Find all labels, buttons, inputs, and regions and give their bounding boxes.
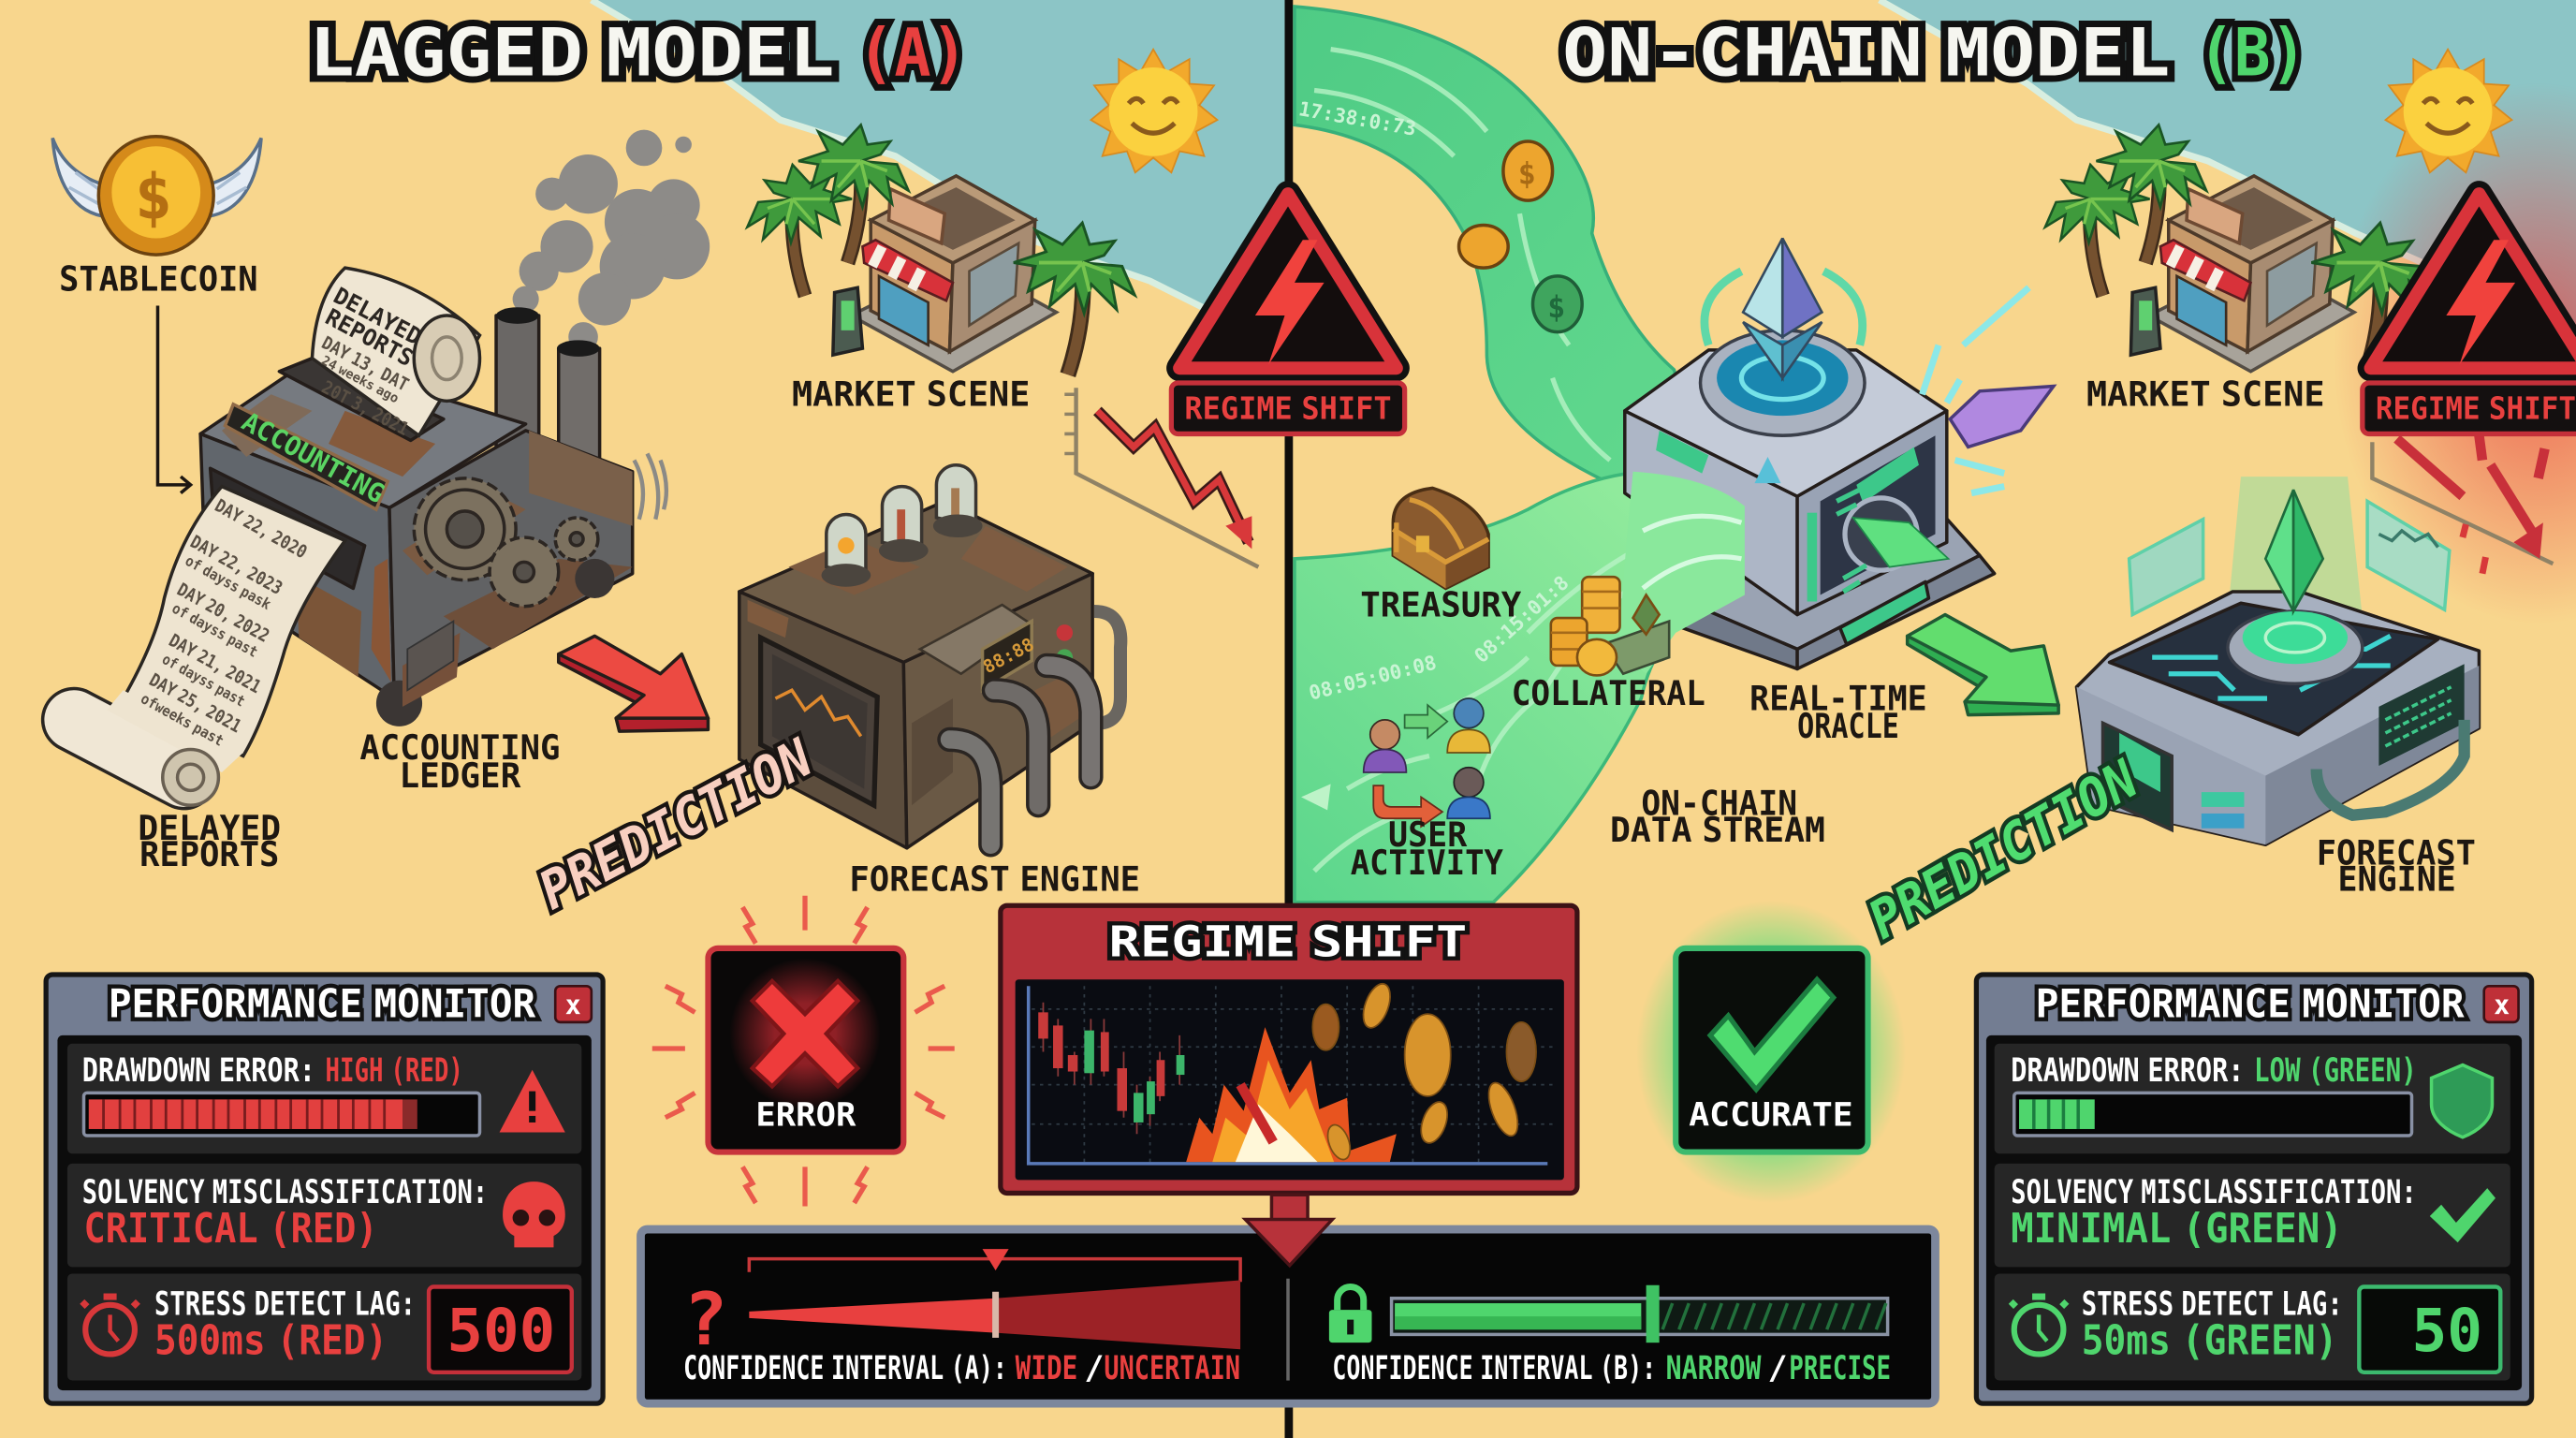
top report paper: REPORTS xyxy=(321,303,417,372)
row: stress detect lag xyxy=(67,1273,581,1381)
row: stress detect lag: STRESS DETECT LAG: xyxy=(2082,1284,2343,1323)
illustration: rusty forecast engine xyxy=(739,465,1120,848)
icon: sun (B) xyxy=(2385,50,2512,172)
row: solvency misclassification: SOLVENCY MISCLASSIFICATION: xyxy=(2011,1173,2417,1211)
label: forecast engine (B) xyxy=(2317,832,2476,899)
row: solvency misclassification xyxy=(67,1164,581,1267)
badge: error rays xyxy=(652,896,955,1206)
purple crystal with sparks xyxy=(1922,287,2054,493)
bar: narrow interval xyxy=(1329,1285,1891,1387)
arrow: green to forecast engine xyxy=(1908,615,2058,715)
machine body xyxy=(200,359,633,726)
icon: user activity xyxy=(1301,698,1490,827)
chart: falling price (A) xyxy=(1064,388,1258,567)
pipes xyxy=(949,666,1090,844)
stream highlight strokes xyxy=(1314,50,1708,871)
sea: left panel xyxy=(592,0,1284,348)
illustration: holographic forecast engine xyxy=(2076,477,2479,844)
row: stress detect lag: 500 xyxy=(446,1296,555,1365)
bar: narrow interval: CONFIDENCE INTERVAL (B): xyxy=(1332,1349,1656,1387)
label: accounting ledger: ACCOUNTING xyxy=(359,727,560,768)
close button: x xyxy=(565,990,581,1020)
label: prediction (A): PREDICTION xyxy=(530,727,823,922)
stream timestamps xyxy=(1297,96,1573,705)
row: stress detect lag: 50ms (GREEN) xyxy=(2082,1316,2338,1364)
red glow at right edge xyxy=(2333,82,2576,624)
long receipt roll: DAY 22, 2023 xyxy=(186,531,286,599)
panel title: REGIME SHIFT xyxy=(1109,917,1467,967)
row: stress detect lag xyxy=(1995,1273,2510,1381)
badge: error xyxy=(708,948,903,1152)
long receipt roll: of dayss pask xyxy=(183,551,274,613)
icon: winged stablecoin xyxy=(52,137,261,255)
long receipt roll: DAY 22, 2020 xyxy=(212,494,311,563)
coins in stream: $ xyxy=(1518,158,1536,192)
top report paper xyxy=(312,268,479,440)
engine pipes xyxy=(2317,720,2465,815)
coins in stream xyxy=(1459,141,1582,332)
hologram beam xyxy=(2224,477,2365,649)
badge: error: ERROR xyxy=(755,1095,856,1134)
icon: sun (A) xyxy=(1090,50,1218,172)
long receipt roll: of dayss past xyxy=(169,599,261,661)
title: lagged model: (A) xyxy=(857,15,968,92)
label: treasury: TREASURY xyxy=(1360,584,1522,624)
oracle lens xyxy=(1837,488,1949,592)
label: user activity xyxy=(1351,814,1504,883)
label: on-chain data stream: ON-CHAIN xyxy=(1641,784,1797,824)
oracle top ring xyxy=(1701,330,1865,435)
top report paper: DAY 13, DAT xyxy=(318,332,413,396)
panel: performance monitor (B) xyxy=(1976,975,2532,1403)
panel: performance monitor (A) xyxy=(46,975,603,1403)
arrow: red to forecast engine xyxy=(559,636,708,731)
coins in stream: $ xyxy=(1547,291,1565,325)
row: drawdown error: DRAWDOWN ERROR: xyxy=(82,1051,315,1090)
stream timestamps: 17:38:0:73 xyxy=(1297,96,1418,140)
engine body xyxy=(2076,592,2479,844)
title: on-chain model: ON-CHAIN MODEL xyxy=(1562,15,2170,92)
row: stress detect lag: STRESS DETECT LAG: xyxy=(154,1284,416,1323)
cone: wide interval xyxy=(683,1249,1240,1387)
row: solvency misclassification: SOLVENCY MISCLASSIFICATION: xyxy=(82,1173,488,1211)
explosion xyxy=(1186,1027,1397,1162)
engine body xyxy=(739,501,1092,848)
ledger slot xyxy=(211,468,365,588)
row: drawdown error xyxy=(67,1044,581,1153)
label: user activity: ACTIVITY xyxy=(1351,843,1504,883)
digital readout and lights: 88:88 xyxy=(979,634,1037,678)
row: drawdown error: LOW (GREEN) xyxy=(2254,1051,2417,1090)
stream timestamps: 08:15:01:8 xyxy=(1470,571,1573,668)
long receipt roll: ofweeks past xyxy=(138,689,227,750)
icon: collateral coins xyxy=(1551,577,1669,675)
top report paper: 24 weeks ago xyxy=(318,353,401,406)
label: forecast engine (B): FORECAST xyxy=(2317,832,2476,873)
label: forecast engine (B): ENGINE xyxy=(2338,858,2456,899)
label: real-time oracle: ORACLE xyxy=(1797,706,1899,746)
long receipt roll: of dayss past xyxy=(159,650,248,711)
oracle base xyxy=(1682,507,1995,668)
crash chart xyxy=(1016,979,1564,1180)
icon: regime shift warning (centre): REGIME SHIFT xyxy=(1184,390,1392,427)
green crystal xyxy=(2265,490,2323,611)
title: on-chain model: (B) xyxy=(2198,15,2306,92)
stream timestamps: 08:05:00:08 xyxy=(1307,651,1439,705)
top slot xyxy=(279,359,444,440)
label: real-time oracle xyxy=(1749,678,1927,746)
chimneys xyxy=(496,307,600,463)
hologram screens xyxy=(2130,501,2450,615)
panel: confidence intervals xyxy=(640,1229,1936,1403)
cone: wide interval: WIDE xyxy=(1016,1349,1077,1387)
label: prediction (B): PREDICTION xyxy=(1859,749,2149,951)
row: drawdown error: HIGH (RED) xyxy=(326,1051,463,1090)
label: delayed reports xyxy=(138,808,281,874)
row: solvency misclassification: MINIMAL (GREEN) xyxy=(2011,1205,2343,1253)
badge: accurate: ACCURATE xyxy=(1689,1095,1853,1134)
close button: x xyxy=(2494,990,2510,1020)
illustration: market scene (A) xyxy=(747,125,1134,374)
arrow head over confidence panel xyxy=(1245,1220,1332,1266)
row: solvency misclassification xyxy=(1995,1164,2510,1267)
label: user activity: USER xyxy=(1388,814,1468,855)
top report paper: 20T 3, 2021 xyxy=(318,376,413,440)
monitor title: PERFORMANCE MONITOR xyxy=(2036,981,2465,1027)
label: market scene (A): MARKET SCENE xyxy=(792,374,1030,415)
cone: wide interval: UNCERTAIN xyxy=(1104,1349,1240,1387)
icon: treasure chest xyxy=(1393,488,1488,588)
label: delayed reports: REPORTS xyxy=(139,834,279,874)
long receipt roll: DAY 21, 2021 xyxy=(166,629,265,697)
cone: wide interval: CONFIDENCE INTERVAL (A): xyxy=(683,1349,1007,1387)
stream entering oracle xyxy=(1618,472,1745,674)
portal ring xyxy=(2228,611,2363,683)
label: forecast engine: FORECAST ENGINE xyxy=(849,858,1140,899)
central divider xyxy=(1284,0,1293,1438)
digital readout and lights xyxy=(979,611,1120,724)
label: market scene (B): MARKET SCENE xyxy=(2086,374,2324,415)
row: stress detect lag: 50 xyxy=(2411,1296,2482,1365)
bar: narrow interval: NARROW xyxy=(1666,1349,1762,1387)
label: on-chain data stream: DATA STREAM xyxy=(1610,810,1825,850)
stream flow lines xyxy=(1643,516,1741,588)
close button xyxy=(555,986,592,1022)
on-chain data stream: lower xyxy=(1295,472,1758,902)
title: lagged model: LAGGED MODEL xyxy=(309,15,835,92)
label: collateral: COLLATERAL xyxy=(1512,673,1705,713)
cone: wide interval: / xyxy=(1084,1349,1105,1387)
monitor title: PERFORMANCE MONITOR xyxy=(109,981,536,1027)
title: lagged model xyxy=(309,15,968,92)
cone: wide interval: ? xyxy=(683,1278,728,1362)
long receipt roll xyxy=(74,487,345,805)
bar: narrow interval: PRECISE xyxy=(1789,1349,1891,1387)
label: accounting ledger xyxy=(359,727,560,796)
engine screen xyxy=(761,638,877,805)
vibration marks xyxy=(634,453,666,520)
icon: regime shift warning (centre) xyxy=(1171,194,1405,433)
illustration: smoke xyxy=(513,130,710,352)
label: on-chain data stream xyxy=(1610,784,1825,850)
top report paper: DELAYED xyxy=(329,282,426,350)
label: accounting ledger: LEDGER xyxy=(399,756,521,796)
arrow: stablecoin to ledger xyxy=(157,306,191,493)
row: drawdown error: DRAWDOWN ERROR: xyxy=(2011,1051,2244,1090)
label: stablecoin: STABLECOIN xyxy=(59,259,258,300)
long receipt roll: DAY 20, 2022 xyxy=(173,579,273,647)
row: solvency misclassification: CRITICAL (RED) xyxy=(84,1205,378,1253)
long receipt roll: DAY 25, 2021 xyxy=(146,669,245,737)
label: delayed reports: DELAYED xyxy=(138,808,281,848)
illustration: accounting machine xyxy=(74,268,666,805)
icon: regime shift warning (B) xyxy=(2363,194,2576,433)
badge: accurate xyxy=(1676,948,1868,1152)
row: drawdown error xyxy=(1995,1044,2510,1153)
label: real-time oracle: REAL-TIME xyxy=(1749,678,1927,718)
oracle body xyxy=(1625,350,1947,615)
icon: winged stablecoin: $ xyxy=(135,160,172,233)
on-chain data stream: upper xyxy=(1295,7,1708,493)
orbit arrows xyxy=(1705,271,1863,345)
falling coins xyxy=(1312,980,1536,1163)
illustration: market scene (B) xyxy=(2045,125,2433,374)
chart: falling price (B) xyxy=(2372,435,2553,574)
sea: right panel xyxy=(1880,0,2576,335)
arrow: regime shift stem xyxy=(1271,1195,1308,1227)
gears xyxy=(414,478,598,607)
vacuum tubes xyxy=(822,465,983,587)
close button xyxy=(2484,986,2519,1022)
illustration: real-time oracle xyxy=(1618,239,2054,674)
panel: regime shift event xyxy=(1001,905,1577,1193)
accounting plate: ACCOUNTING xyxy=(237,406,389,509)
row: stress detect lag: 500ms (RED) xyxy=(154,1316,388,1364)
bar: narrow interval: / xyxy=(1767,1349,1788,1387)
glow: accurate badge xyxy=(1636,901,1906,1203)
ethereum crystal xyxy=(1743,239,1822,378)
